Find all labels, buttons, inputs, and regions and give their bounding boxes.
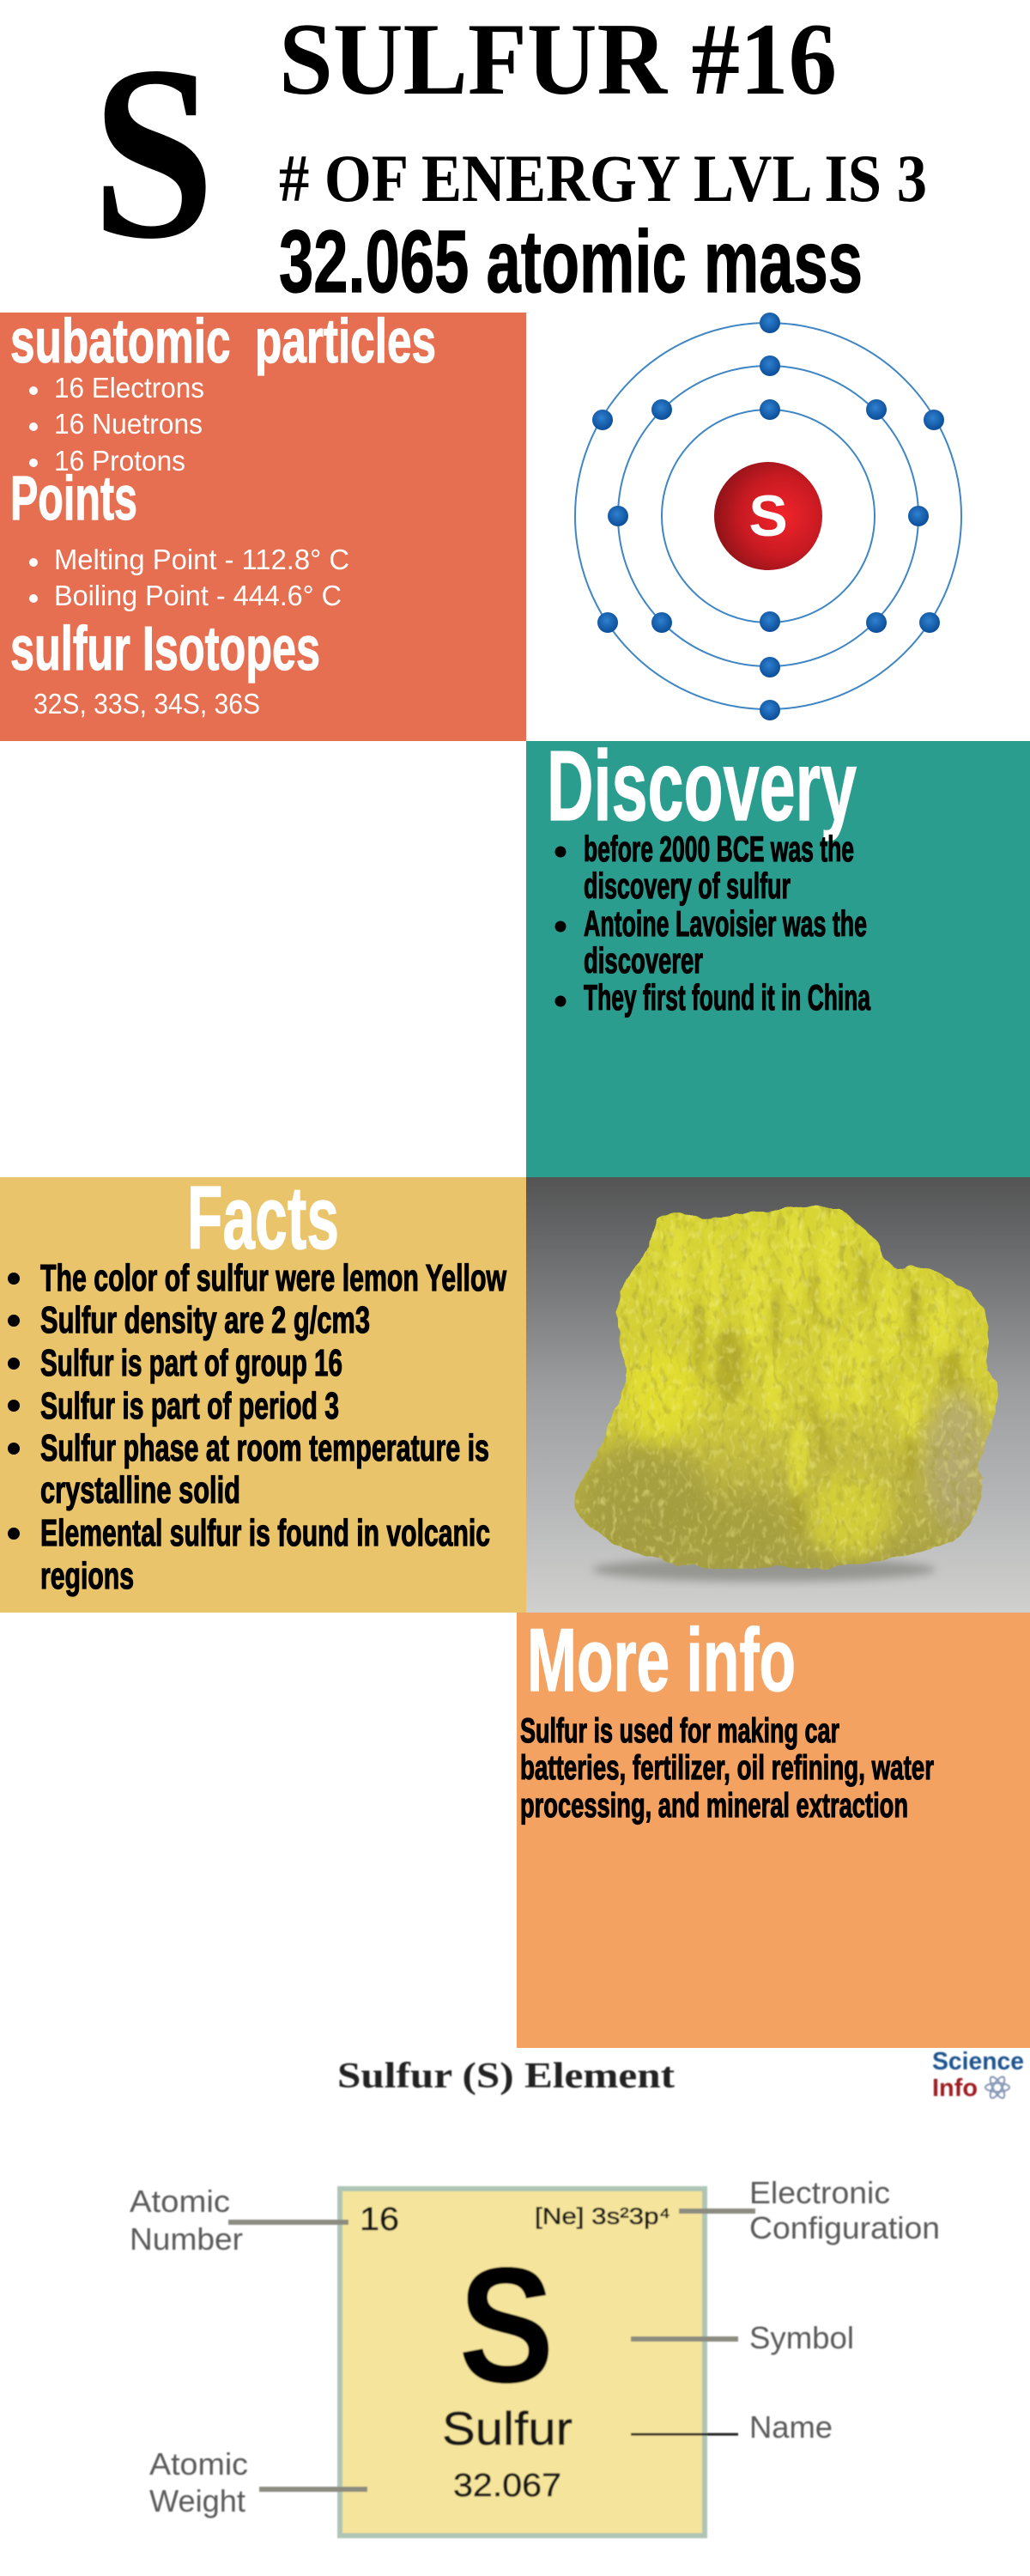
title: Sulfur #16: SULFUR #16 [279,2,837,116]
big element symbol S: S [92,15,215,290]
heading: more info: More info [527,1611,796,1710]
element card diagram [130,2175,940,2536]
label: atomic number: Number [130,2221,243,2257]
list: melting and boiling points: Boiling Point - 444.6° C [54,580,342,611]
list: melting and boiling points: Melting Point - 112.8° C [54,544,349,575]
element card: 32.067 [453,2468,561,2504]
list: discovery facts: They first found it in China [584,977,870,1018]
label: atomic weight [149,2446,367,2518]
list: particle counts [29,372,204,477]
energy level heading: # OF ENERGY LVL IS 3 [279,141,927,216]
label: atomic weight: Weight [149,2483,245,2518]
atom diagram: electron shells [575,313,961,720]
electrons [592,313,944,720]
label: symbol: Symbol [749,2320,854,2355]
list: sulfur facts: Elemental sulfur is found in volcanic [40,1512,490,1554]
list: discovery facts: Antoine Lavoisier was the [584,903,867,944]
text: isotope list: 32S, 33S, 34S, 36S [33,688,260,720]
list: melting and boiling points [29,544,349,611]
nucleus: S [748,483,788,549]
panel: subatomic particles, points, isotopes [0,307,526,741]
label: electronic configuration [679,2175,940,2245]
heading: sulfur isotopes: sulfur Isotopes [10,615,320,683]
list: sulfur facts: Sulfur is part of period 3 [40,1385,339,1427]
label: electronic configuration: Electronic [749,2175,890,2210]
list: sulfur facts: Sulfur is part of group 16 [40,1342,342,1384]
label: atomic weight: Atomic [149,2446,248,2482]
list: discovery facts [554,829,870,1018]
element card: 16 [360,2202,399,2238]
element card [340,2189,705,2536]
heading: facts: Facts [187,1169,339,1268]
photo: sulfur mineral specimen [526,1177,1030,1613]
label: electronic configuration: Configuration [749,2210,940,2245]
heading: subatomic particles: subatomic particles [10,307,436,376]
nucleus [714,462,822,570]
list: sulfur facts [8,1257,507,1597]
logo: Science Info [932,2048,1024,2102]
element card: [Ne] 3s²3p⁴ [535,2203,670,2229]
panel: discovery [526,730,1030,1177]
list: sulfur facts: crystalline solid [40,1469,240,1511]
label: name: Name [749,2409,833,2445]
logo: Science Info: Science [932,2048,1024,2075]
list: sulfur facts: regions [40,1555,134,1597]
label: atomic number [130,2184,348,2257]
element card: Sulfur [442,2402,573,2455]
heading: discovery: Discovery [547,730,857,841]
heading: points: Points [10,465,137,533]
list: sulfur facts: Sulfur density are 2 g/cm3 [40,1299,370,1341]
text: uses of sulfur [520,1712,934,1825]
label: atomic number: Atomic [130,2184,230,2219]
heading: sulfur element: Sulfur (S) Element [337,2057,675,2096]
list: discovery facts: before 2000 BCE was the [584,829,854,869]
list: particle counts: 16 Nuetrons [54,408,203,440]
panel: facts [0,1169,526,1613]
text: uses of sulfur: Sulfur is used for making car [520,1712,839,1750]
panel: more info [517,1611,1030,2048]
element card: S [458,2233,554,2418]
list: sulfur facts: The color of sulfur were lemon Yellow [40,1257,507,1299]
list: sulfur facts: Sulfur phase at room temperature is [40,1427,489,1469]
logo: Science Info: Info [932,2075,978,2102]
list: discovery facts: discoverer [584,940,703,981]
list: particle counts: 16 Protons [54,445,185,477]
list: discovery facts: discovery of sulfur [584,866,791,906]
icon: atom [985,2075,1009,2100]
list: particle counts: 16 Electrons [54,372,204,404]
